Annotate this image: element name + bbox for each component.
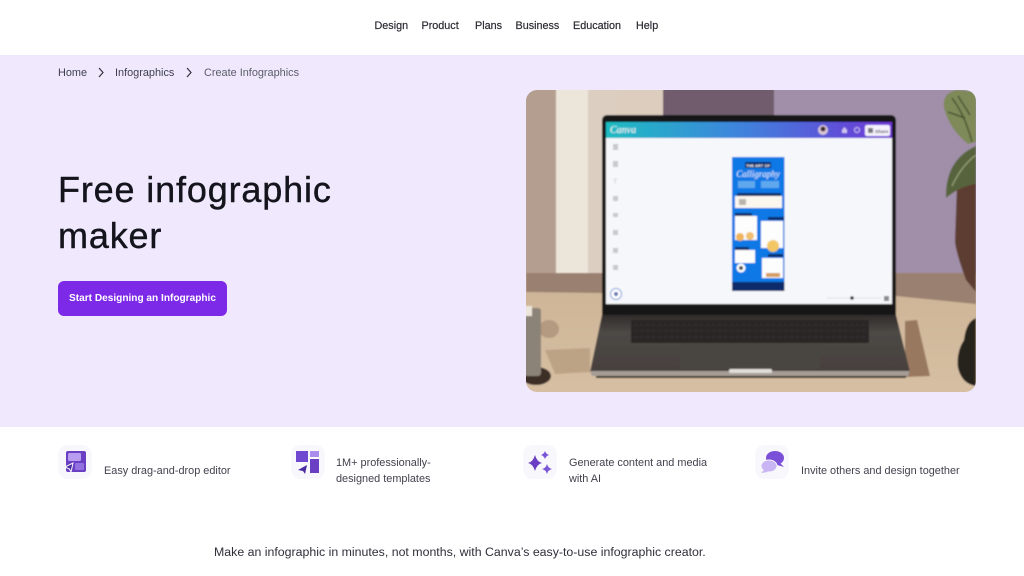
share button: Share — [875, 129, 889, 135]
screen — [606, 122, 892, 304]
wall background — [520, 85, 980, 285]
nav link: Product: Product — [422, 20, 459, 32]
mini infographic on canvas: Calligraphy — [736, 169, 780, 179]
feature text: Invite others and design together — [801, 465, 960, 477]
breadcrumb — [58, 67, 299, 79]
black object at right — [958, 318, 976, 386]
feature text — [336, 457, 431, 485]
breadcrumb: Create Infographics: Create Infographics — [204, 67, 299, 79]
photo: laptop on desk showing Canva editor — [526, 90, 976, 392]
icon: breadcrumb chevron — [98, 68, 104, 78]
feature: drag-and-drop editor — [66, 451, 231, 477]
editor side tools: T — [613, 179, 618, 186]
nav link: Business: Business — [516, 20, 559, 32]
editor side tools — [613, 144, 618, 270]
panel: hero — [0, 55, 1024, 427]
nav link: Education: Education — [573, 20, 621, 32]
avatar — [818, 125, 828, 135]
nav link: Design: Design — [374, 20, 408, 32]
desk — [520, 273, 980, 398]
laptop base — [590, 315, 910, 372]
icon: drag and drop — [58, 445, 92, 479]
mini infographic on canvas: THE ART OF — [746, 163, 770, 168]
button: start designing — [58, 281, 227, 316]
plant and pot — [944, 90, 976, 292]
screen bezel — [602, 115, 896, 315]
share button — [865, 125, 890, 136]
Canva logo: Canva — [610, 125, 636, 136]
nav link: Plans: Plans — [475, 20, 502, 32]
help button — [610, 288, 622, 300]
heading — [58, 169, 332, 256]
zoom slider — [827, 296, 889, 301]
feature text: Generate content and media — [569, 457, 707, 469]
front edge — [590, 371, 910, 376]
notch — [729, 369, 772, 373]
candle at left — [521, 306, 551, 385]
feature: collaboration — [761, 451, 960, 477]
feature text: Easy drag-and-drop editor — [104, 465, 231, 477]
breadcrumb: Infographics: Infographics — [115, 67, 174, 79]
feature text: designed templates — [336, 473, 430, 485]
breadcrumb: Home: Home — [58, 67, 87, 79]
editor top bar — [606, 122, 892, 138]
heading: maker — [58, 215, 162, 256]
intro text: Make an infographic in minutes, not months, with Canva’s easy-to-use infographic creator. — [214, 545, 706, 559]
keyboard — [631, 320, 869, 343]
top navigation — [0, 0, 1024, 55]
heading: Free infographic — [58, 169, 332, 210]
feature: templates — [296, 451, 431, 485]
feature: AI content — [528, 451, 708, 485]
nav link: Help: Help — [636, 20, 658, 32]
feature text — [569, 457, 708, 485]
feature text: with AI — [569, 473, 601, 485]
trackpad — [680, 344, 820, 369]
icon: breadcrumb chevron — [186, 68, 192, 78]
icon: sparkles — [523, 445, 557, 479]
top bar icons — [842, 127, 860, 133]
feature text: 1M+ professionally- — [336, 457, 431, 469]
laptop — [590, 115, 910, 378]
icon: speech bubbles — [755, 445, 789, 479]
button: start designing: Start Designing an Infographic — [69, 293, 216, 304]
icon: templates — [291, 445, 325, 479]
mini infographic on canvas — [732, 157, 784, 291]
